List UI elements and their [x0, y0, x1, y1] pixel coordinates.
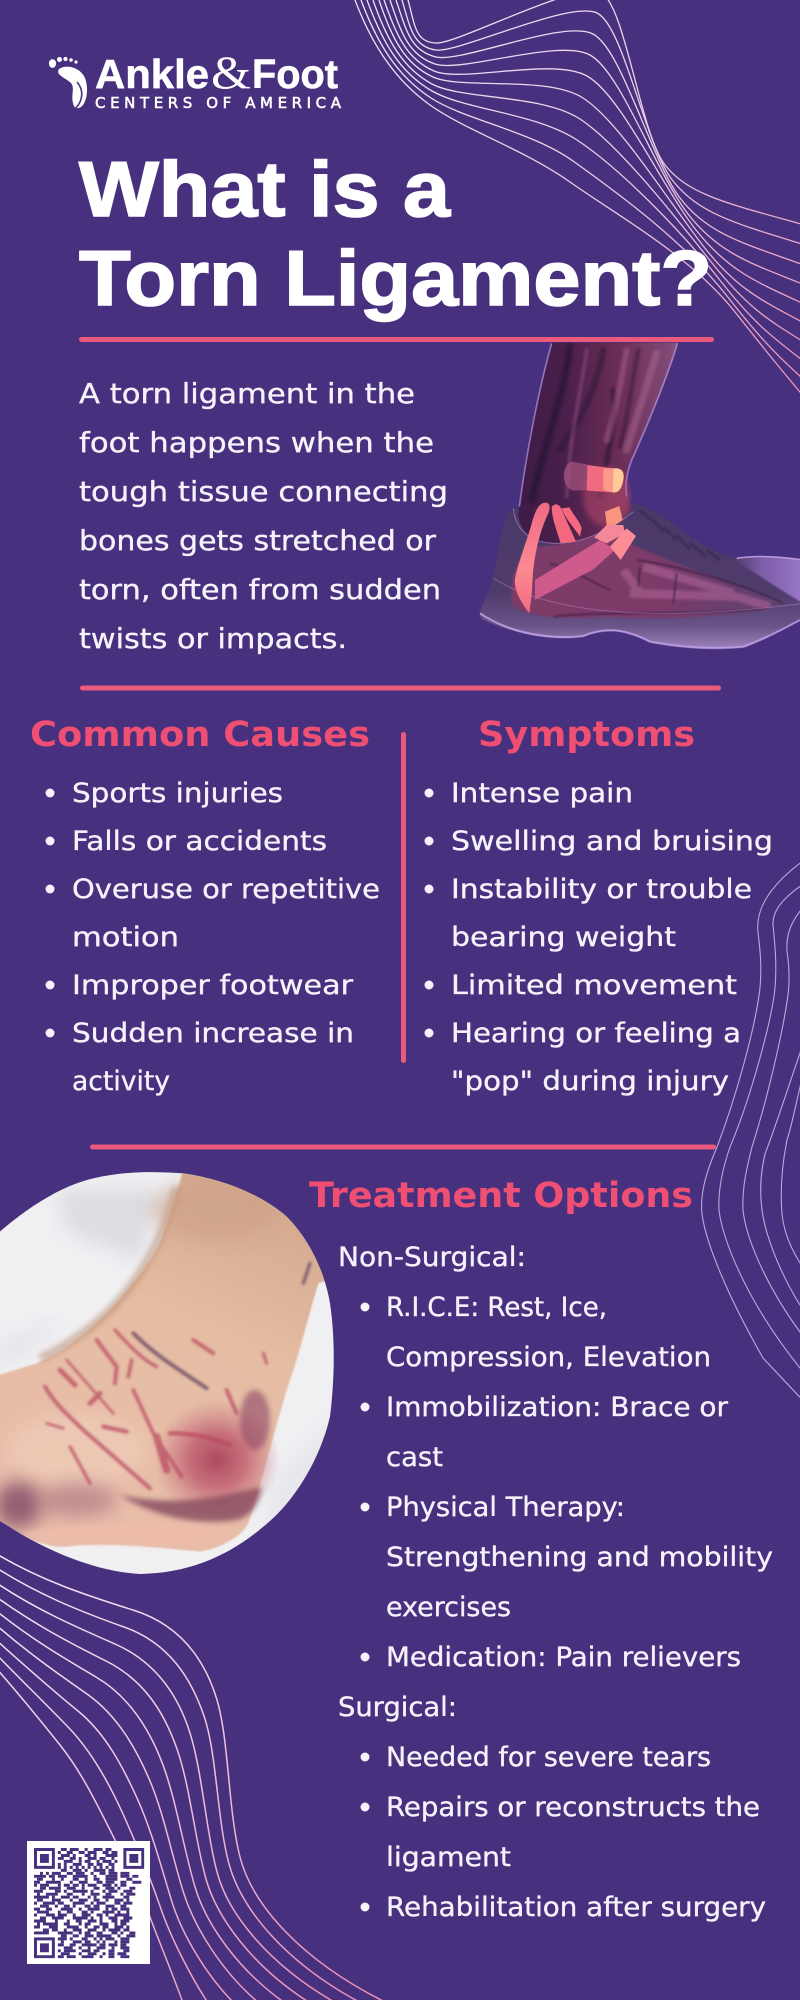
heading: treatment options: Treatment Options: [309, 1176, 693, 1216]
list: non-surgical: Physical Therapy:: [386, 1492, 625, 1523]
QR code: [27, 1841, 150, 1964]
red streaks: [45, 1330, 267, 1488]
decorative wave lines: bottom left: [0, 1553, 387, 2000]
ligament: heel band: [515, 503, 550, 613]
leg highlight edges: [519, 343, 677, 507]
list: non-surgical: exercises: [386, 1592, 511, 1623]
heading: common causes: Common Causes: [30, 715, 370, 755]
foot interior: [512, 535, 783, 618]
list: symptoms: bearing weight: [451, 922, 676, 953]
panel: common causes: [30, 715, 380, 1097]
list: symptoms: Hearing or feeling a: [451, 1018, 741, 1049]
list: causes: Sports injuries: [72, 778, 283, 809]
list: causes: Sudden increase in: [72, 1018, 354, 1049]
list: surgical: Repairs or reconstructs the: [386, 1792, 760, 1823]
list: non-surgical: Strengthening and mobility: [386, 1542, 773, 1573]
title: [79, 145, 712, 322]
intro text: tough tissue connecting: [79, 476, 448, 508]
photo: bruised ankle in organic blob: [0, 1163, 347, 1583]
bottom pale band: [26, 1528, 148, 1548]
foot skin: [0, 1167, 347, 1552]
list: non-surgical: Immobilization: Brace or: [386, 1392, 728, 1423]
list: causes: [46, 778, 380, 1097]
logo wordmark: Ankle: [95, 51, 209, 97]
ligament: front bands: [594, 506, 636, 560]
list: surgical: Needed for severe tears: [386, 1742, 711, 1773]
intro text: foot happens when the: [79, 427, 434, 459]
heading: symptoms: Symptoms: [478, 715, 695, 755]
leg muscle streaks: [532, 347, 657, 500]
list: symptoms: [424, 778, 773, 1097]
title: Torn Ligament?: [79, 234, 712, 322]
ligament: small bands: [552, 504, 576, 543]
left bruise: [0, 1482, 42, 1528]
title underline: [79, 337, 714, 342]
list: symptoms: "pop" during injury: [451, 1066, 729, 1097]
subheading: non-surgical: Non-Surgical:: [338, 1242, 526, 1273]
shoe body: [480, 503, 800, 648]
list: causes: motion: [72, 922, 179, 953]
lower bruise band: [120, 1487, 262, 1522]
shoe sole highlights: [480, 557, 800, 648]
foot tendon lines: [550, 560, 783, 617]
subheading: surgical: Surgical:: [338, 1692, 457, 1723]
foot bones: [623, 567, 770, 607]
intro text: [79, 378, 448, 655]
intro text: twists or impacts.: [79, 623, 347, 655]
list: surgical: ligament: [386, 1842, 511, 1873]
heel bruise: [158, 1404, 278, 1502]
intro text: bones gets stretched or: [79, 525, 437, 557]
list: surgical: [360, 1742, 766, 1923]
list: non-surgical: R.I.C.E: Rest, Ice,: [386, 1292, 607, 1323]
icon: foot: [49, 57, 87, 108]
list: non-surgical: Medication: Pain relievers: [386, 1642, 741, 1673]
purple streaks: [133, 1263, 310, 1388]
list: non-surgical: [360, 1292, 773, 1673]
decorative wave lines: top right: [355, 0, 800, 410]
shoe toe highlight: [733, 557, 800, 603]
list: causes: Overuse or repetitive: [72, 874, 380, 905]
divider under intro: [80, 686, 721, 690]
decorative wave lines: right side: [702, 856, 800, 1408]
pale foot area: [14, 1418, 140, 1480]
ligament: upper capsule: [564, 462, 624, 492]
list: non-surgical: cast: [386, 1442, 443, 1473]
logo: Ankle & Foot Centers of America: [49, 47, 342, 112]
leg: [518, 343, 678, 543]
skin shading along leg edge: [40, 1187, 177, 1358]
list: symptoms: Limited movement: [451, 970, 737, 1001]
list: causes: Falls or accidents: [72, 826, 327, 857]
intro text: torn, often from sudden: [79, 574, 441, 606]
divider above treatment: [90, 1144, 716, 1150]
heel edge bruise: [240, 1390, 270, 1450]
vertical divider: [401, 732, 406, 1063]
list: causes: activity: [72, 1066, 170, 1097]
towel folds: [12, 1184, 318, 1510]
list: symptoms: Intense pain: [451, 778, 633, 809]
towel background: [0, 1163, 347, 1583]
shoe collar line: [513, 508, 633, 543]
logo wordmark: CENTERS OF AMERICA: [95, 94, 342, 112]
skin shading: upper leg: [150, 1180, 277, 1240]
ligament: diagonal band: [535, 540, 615, 600]
list: surgical: Rehabilitation after surgery: [386, 1892, 766, 1923]
logo wordmark: Foot: [252, 51, 338, 97]
laces: [640, 510, 720, 560]
illustration: translucent leg and running shoe with glowing ligaments: [480, 343, 800, 648]
panel: symptoms: [424, 715, 773, 1097]
panel: treatment options: [309, 1176, 773, 1923]
logo wordmark: [95, 47, 342, 112]
title: What is a: [79, 145, 451, 233]
list: symptoms: Swelling and bruising: [451, 826, 773, 857]
logo wordmark: &: [211, 47, 251, 99]
list: causes: Improper footwear: [72, 970, 353, 1001]
list: non-surgical: Compression, Elevation: [386, 1342, 711, 1373]
intro text: A torn ligament in the: [79, 378, 415, 410]
ankle glow: [583, 467, 630, 527]
list: symptoms: Instability or trouble: [451, 874, 752, 905]
